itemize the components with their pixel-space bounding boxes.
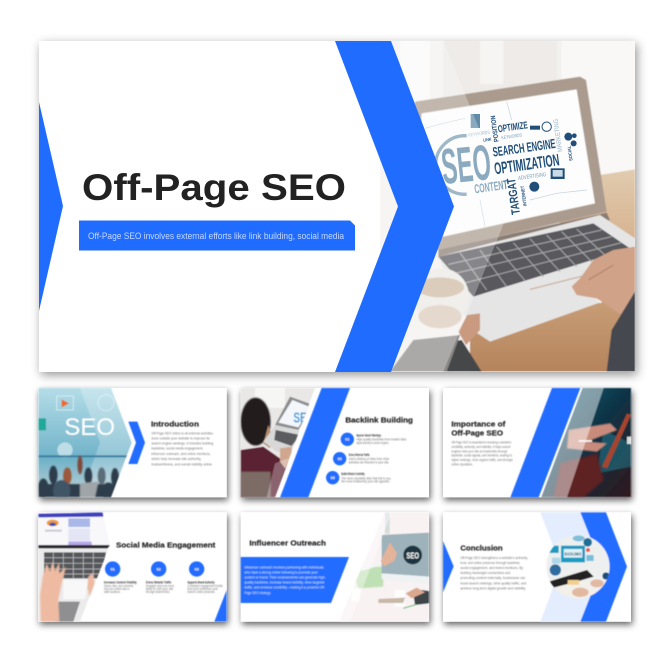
- text block: conclusion body: trust, and online presence through backlinks,: [460, 561, 520, 565]
- SEO word cloud: KEYWORDS: [468, 130, 490, 138]
- column 03: Supports Brand Authority: brand's online presence.: [187, 590, 215, 594]
- photo: man at laptop: SE: [293, 411, 307, 427]
- SEO word cloud: KEYWORDS: [501, 132, 522, 140]
- photo: backlinks circle: BACKLINKS: [565, 551, 581, 556]
- text block: conclusion body: building meaningful connections and: [460, 571, 510, 575]
- SEO word cloud: SEO: [439, 134, 494, 195]
- column 02: Drives Website Traffic: Drives Website Traffic: [146, 580, 171, 584]
- item 01: Improve Search Rankings: Improve Search Rankings: [356, 434, 381, 438]
- text block: conclusion body: social engagement, and brand mentions. By: [460, 566, 523, 570]
- photo: laptop with SEO word cloud: [380, 41, 635, 372]
- text panel: blue band: traffic, and enhance credibility—making it a powerful Off-: [244, 586, 325, 590]
- photo: SEO meeting room: SEO: [64, 414, 115, 441]
- text block: introduction body: trustworthiness, and overall visibility online.: [151, 462, 213, 466]
- text block: importance body: online reputation.: [451, 463, 473, 467]
- slide: Social Media Engagement: [38, 512, 227, 622]
- heading: Social Media Engagement: Social Media Engagement: [116, 542, 216, 549]
- column 01: Increases Content Visibility: Increases Content Visibility: [104, 580, 137, 584]
- item 02: Drives Referral Traffic: Users clicking on links from other: [349, 457, 390, 461]
- SEO word cloud: LINK: [483, 136, 492, 143]
- SEO word cloud: OPTIMIZE: [497, 120, 529, 135]
- shape: left blue triangle: [443, 541, 454, 592]
- text panel: blue band: Page SEO strategy.: [244, 591, 271, 595]
- photo: man at laptop: [241, 388, 316, 498]
- item 03: Builds Website Credibility: Builds Website Credibility: [341, 472, 365, 476]
- item 01: Improve Search Rankings: [341, 433, 407, 446]
- item 03: Builds Website Credibility: [326, 471, 391, 484]
- heading: Importance of Off-Page SEO: Off-Page SEO: [451, 430, 504, 437]
- column 01: Increases Content Visibility: Shares, likes, and comments: [104, 584, 133, 588]
- column 03: Supports Brand Authority: Supports Brand Authority: [187, 580, 215, 584]
- SEO word cloud: TARGAT: [504, 177, 523, 216]
- text block: importance body: higher rankings, more organic traffic, and stronger: [451, 458, 514, 462]
- SEO word cloud: INTERNET: [520, 185, 528, 207]
- item 01: Improve Search Rankings: signal authority to search engines.: [356, 441, 389, 445]
- item 01: Improve Search Rankings: High-quality backlinks from trusted sites: [356, 438, 407, 442]
- title: Off-Page SEO: Off-Page SEO: [82, 166, 346, 208]
- shape: blue diagonal band: [280, 388, 350, 497]
- text panel: blue band: content or brand. Their endorsements can generate high-: [244, 575, 326, 579]
- text block: conclusion body: Off-Page SEO strengthens a website's authority,: [460, 556, 528, 560]
- column 01: Increases Content Visibility: help your content reach a: [104, 587, 129, 591]
- text block: introduction body: influencer outreach, and online mentions,: [151, 452, 211, 456]
- text block: introduction body: which help increase site authority,: [151, 457, 201, 461]
- column 01: Increases Content Visibility: wider audience.: [104, 590, 121, 594]
- slide: Introduction: [38, 388, 227, 501]
- column 02: Drives Website Traffic: [146, 561, 174, 594]
- SEO word cloud: [425, 102, 587, 227]
- item 03: Builds Website Credibility: 03: [330, 475, 336, 480]
- photo: backlinks circle: [545, 534, 611, 600]
- text panel: blue band: quality backlinks, increase brand visibility, drive targeted: [244, 580, 324, 584]
- shape: blue chevron: [335, 41, 454, 372]
- SEO word cloud: SOCIAL: [567, 145, 574, 161]
- shape: blue chevron: [580, 512, 627, 622]
- icon: blue chevron: [128, 422, 145, 464]
- SEO word cloud: SEARCH ENGINE: [492, 136, 557, 160]
- slide: Importance of Off-Page SEO: [443, 388, 631, 497]
- column 01: Increases Content Visibility: 01: [110, 566, 116, 571]
- subtitle bar: Off-Page SEO involves external efforts like link building, social media: [88, 231, 345, 242]
- photo: hands on laptop keyboard: [38, 512, 110, 622]
- item 02: Drives Referral Traffic: 02: [337, 456, 343, 461]
- heading: Backlink Building: Backlink Building: [345, 417, 413, 424]
- item 01: Improve Search Rankings: 01: [345, 437, 350, 442]
- text block: importance body: backlinks, social signals, and mentions, leading to: [451, 454, 512, 458]
- column 03: Supports Brand Authority: 03: [194, 566, 200, 571]
- text block: introduction body: search engine rankings. It includes building: [151, 441, 213, 445]
- item 03: Builds Website Credibility: the more trustworthy your site appears.: [341, 480, 390, 484]
- text block: introduction body: [151, 431, 213, 466]
- SEO word cloud: CONTENT: [473, 178, 509, 196]
- slide: title: [39, 41, 635, 372]
- shape: blue diagonal band: [510, 388, 580, 497]
- shape: left blue triangle: [39, 102, 63, 311]
- column 02: Drives Website Traffic: likely to visit your site: [146, 587, 173, 591]
- slide: Influencer Outreach: [241, 512, 429, 622]
- heading: Influencer Outreach: Influencer Outreach: [249, 540, 326, 547]
- column 03: Supports Brand Authority: Consistent engagement builds: [187, 584, 223, 588]
- column 02: Drives Website Traffic: Engaged users are more: [146, 584, 174, 588]
- SEO word cloud: OPTIMIZATION: [493, 150, 561, 178]
- heading: Importance of Off-Page SEO: Importance of: [451, 422, 506, 429]
- text block: introduction body: done outside your website to improve its: [151, 436, 210, 440]
- text block: conclusion body: [460, 556, 528, 590]
- heading: Conclusion: Conclusion: [460, 545, 503, 552]
- subtitle bar: [79, 220, 355, 250]
- SEO word cloud: ADVERTISING: [518, 172, 547, 182]
- slide: Backlink Building: [241, 388, 429, 498]
- shape: light blue chevron: [540, 512, 602, 622]
- column 02: Drives Website Traffic: 02: [156, 566, 162, 571]
- text panel: blue band: [241, 557, 349, 603]
- text block: introduction body: Off-Page SEO refers to all external activities: [151, 431, 213, 435]
- column 03: Supports Brand Authority: [187, 561, 223, 594]
- photo: hand pointing at SEO monitor: SEO: [406, 550, 419, 560]
- text block: importance body: [451, 441, 514, 467]
- text panel: blue band: Influencer outreach involves partnering with individuals: [244, 566, 324, 570]
- photo: SEO meeting room: [38, 388, 133, 501]
- column 01: Increases Content Visibility: [104, 561, 137, 594]
- text block: conclusion body: promoting content externally, businesses can: [460, 576, 525, 580]
- photo: finger on tablet: [537, 388, 631, 497]
- text panel: blue band: who have a strong online following to promote your: [244, 571, 318, 575]
- slide: Conclusion: [443, 512, 631, 622]
- text block: importance body: credibility, authority, and visibility. It helps search: [451, 445, 511, 449]
- column 02: Drives Website Traffic: through shared links.: [146, 590, 170, 594]
- SEO word cloud: POSITION: [490, 115, 501, 142]
- shape: blue corner: [214, 590, 227, 622]
- item 02: Drives Referral Traffic: Drives Referral Traffic: [349, 453, 370, 457]
- column 03: Supports Brand Authority: trust and reinforces your: [187, 587, 219, 591]
- text block: conclusion body: boost search rankings, drive quality traffic, and: [460, 581, 526, 585]
- SEO word cloud: MARKETING: [553, 118, 564, 152]
- item 02: Drives Referral Traffic: [333, 452, 390, 465]
- item 03: Builds Website Credibility: The more reputable sites that link to you,: [341, 476, 391, 480]
- heading: Importance of Off-Page SEO: [451, 422, 506, 437]
- photo: hand pointing at SEO monitor: [335, 512, 429, 622]
- heading: Introduction: Introduction: [151, 422, 199, 429]
- text block: conclusion body: achieve long-term digital growth and visibility.: [460, 586, 526, 590]
- item 02: Drives Referral Traffic: websites are directed to your site.: [349, 460, 389, 464]
- text block: importance body: Off-Page SEO is essential for boosting a website's: [451, 441, 512, 445]
- text block: importance body: engines view your site as trustworthy through: [451, 449, 507, 453]
- text block: introduction body: backlinks, social media engagement,: [151, 447, 203, 451]
